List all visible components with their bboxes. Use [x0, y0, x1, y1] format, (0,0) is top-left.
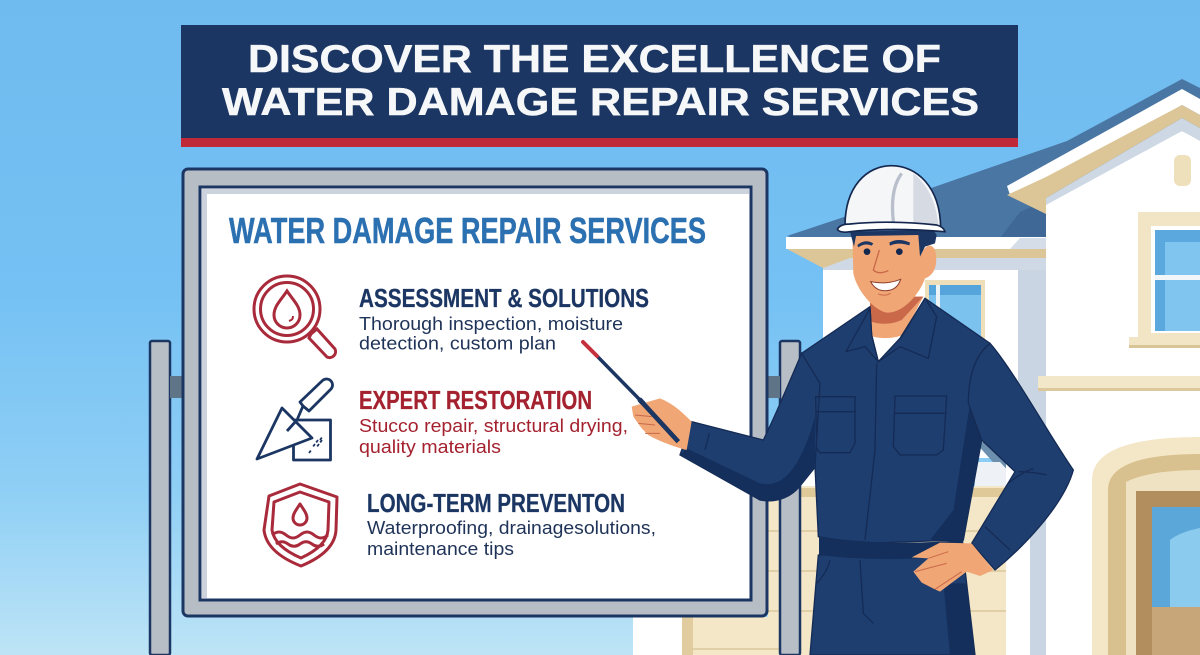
main gable wall: [1007, 89, 1200, 655]
icon: shield with water drop and waves: [264, 484, 337, 566]
service two description: Stucco repair, structural drying,: [359, 415, 628, 436]
neck shadow: [870, 297, 923, 324]
house: [633, 79, 1200, 655]
neck: [870, 297, 923, 338]
lower porch and siding: [633, 440, 1046, 655]
placket and pocket lines: [705, 363, 1047, 623]
service two heading: EXPERT RESTORATION: [359, 385, 592, 415]
title line two: WATER DAMAGE REPAIR SERVICES: [222, 81, 979, 124]
title line one: DISCOVER THE EXCELLENCE OF: [248, 38, 941, 81]
belt: [819, 537, 963, 559]
torso: [802, 298, 990, 543]
lower house window: [925, 280, 985, 350]
upper right window: [1129, 212, 1200, 348]
sign board: [183, 169, 767, 616]
pointing hand: [632, 398, 692, 450]
collar: [846, 298, 937, 362]
head: [850, 230, 937, 313]
icon: trowel and wall patch: [257, 379, 333, 460]
hard hat: [837, 166, 945, 232]
service one description: detection, custom plan: [359, 332, 556, 354]
service three description: maintenance tips: [367, 538, 514, 559]
service two description: quality materials: [359, 436, 501, 457]
horizontal trim band: [1038, 376, 1200, 391]
title banner: [181, 25, 1018, 147]
service one heading: ASSESSMENT & SOLUTIONS: [359, 283, 649, 313]
service three heading: LONG-TERM PREVENTON: [367, 488, 625, 518]
icon: magnifying glass with water drop: [254, 276, 336, 358]
pointing arm: [680, 353, 820, 501]
pointer stick: [583, 342, 678, 441]
arched doorway: [1092, 437, 1200, 655]
shirt: [868, 333, 907, 362]
torso shading: [930, 403, 982, 540]
service three description: Waterproofing, drainagesolutions,: [367, 517, 656, 538]
trouser shading: [943, 583, 975, 655]
technician figure: [632, 166, 1073, 655]
hip arm: [968, 343, 1073, 570]
board heading: WATER DAMAGE REPAIR SERVICES: [229, 210, 706, 251]
hand on hip: [912, 543, 993, 592]
lower house wall: [786, 237, 1046, 655]
arm underside shading: [680, 417, 815, 501]
sign posts: [150, 341, 800, 655]
lower house blue roof: [787, 79, 1200, 240]
trousers: [810, 555, 975, 655]
service one description: Thorough inspection, moisture: [359, 313, 623, 334]
